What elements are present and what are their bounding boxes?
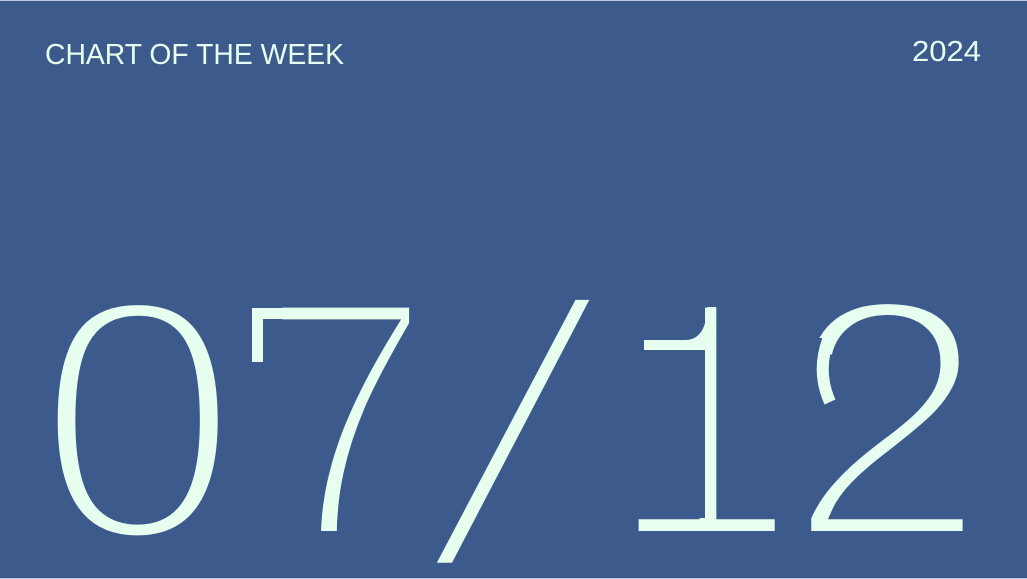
title: CHART OF THE WEEK [45,39,345,71]
header text [45,36,981,71]
year: 2024 [912,36,981,68]
large date number 07/12 [36,220,988,579]
